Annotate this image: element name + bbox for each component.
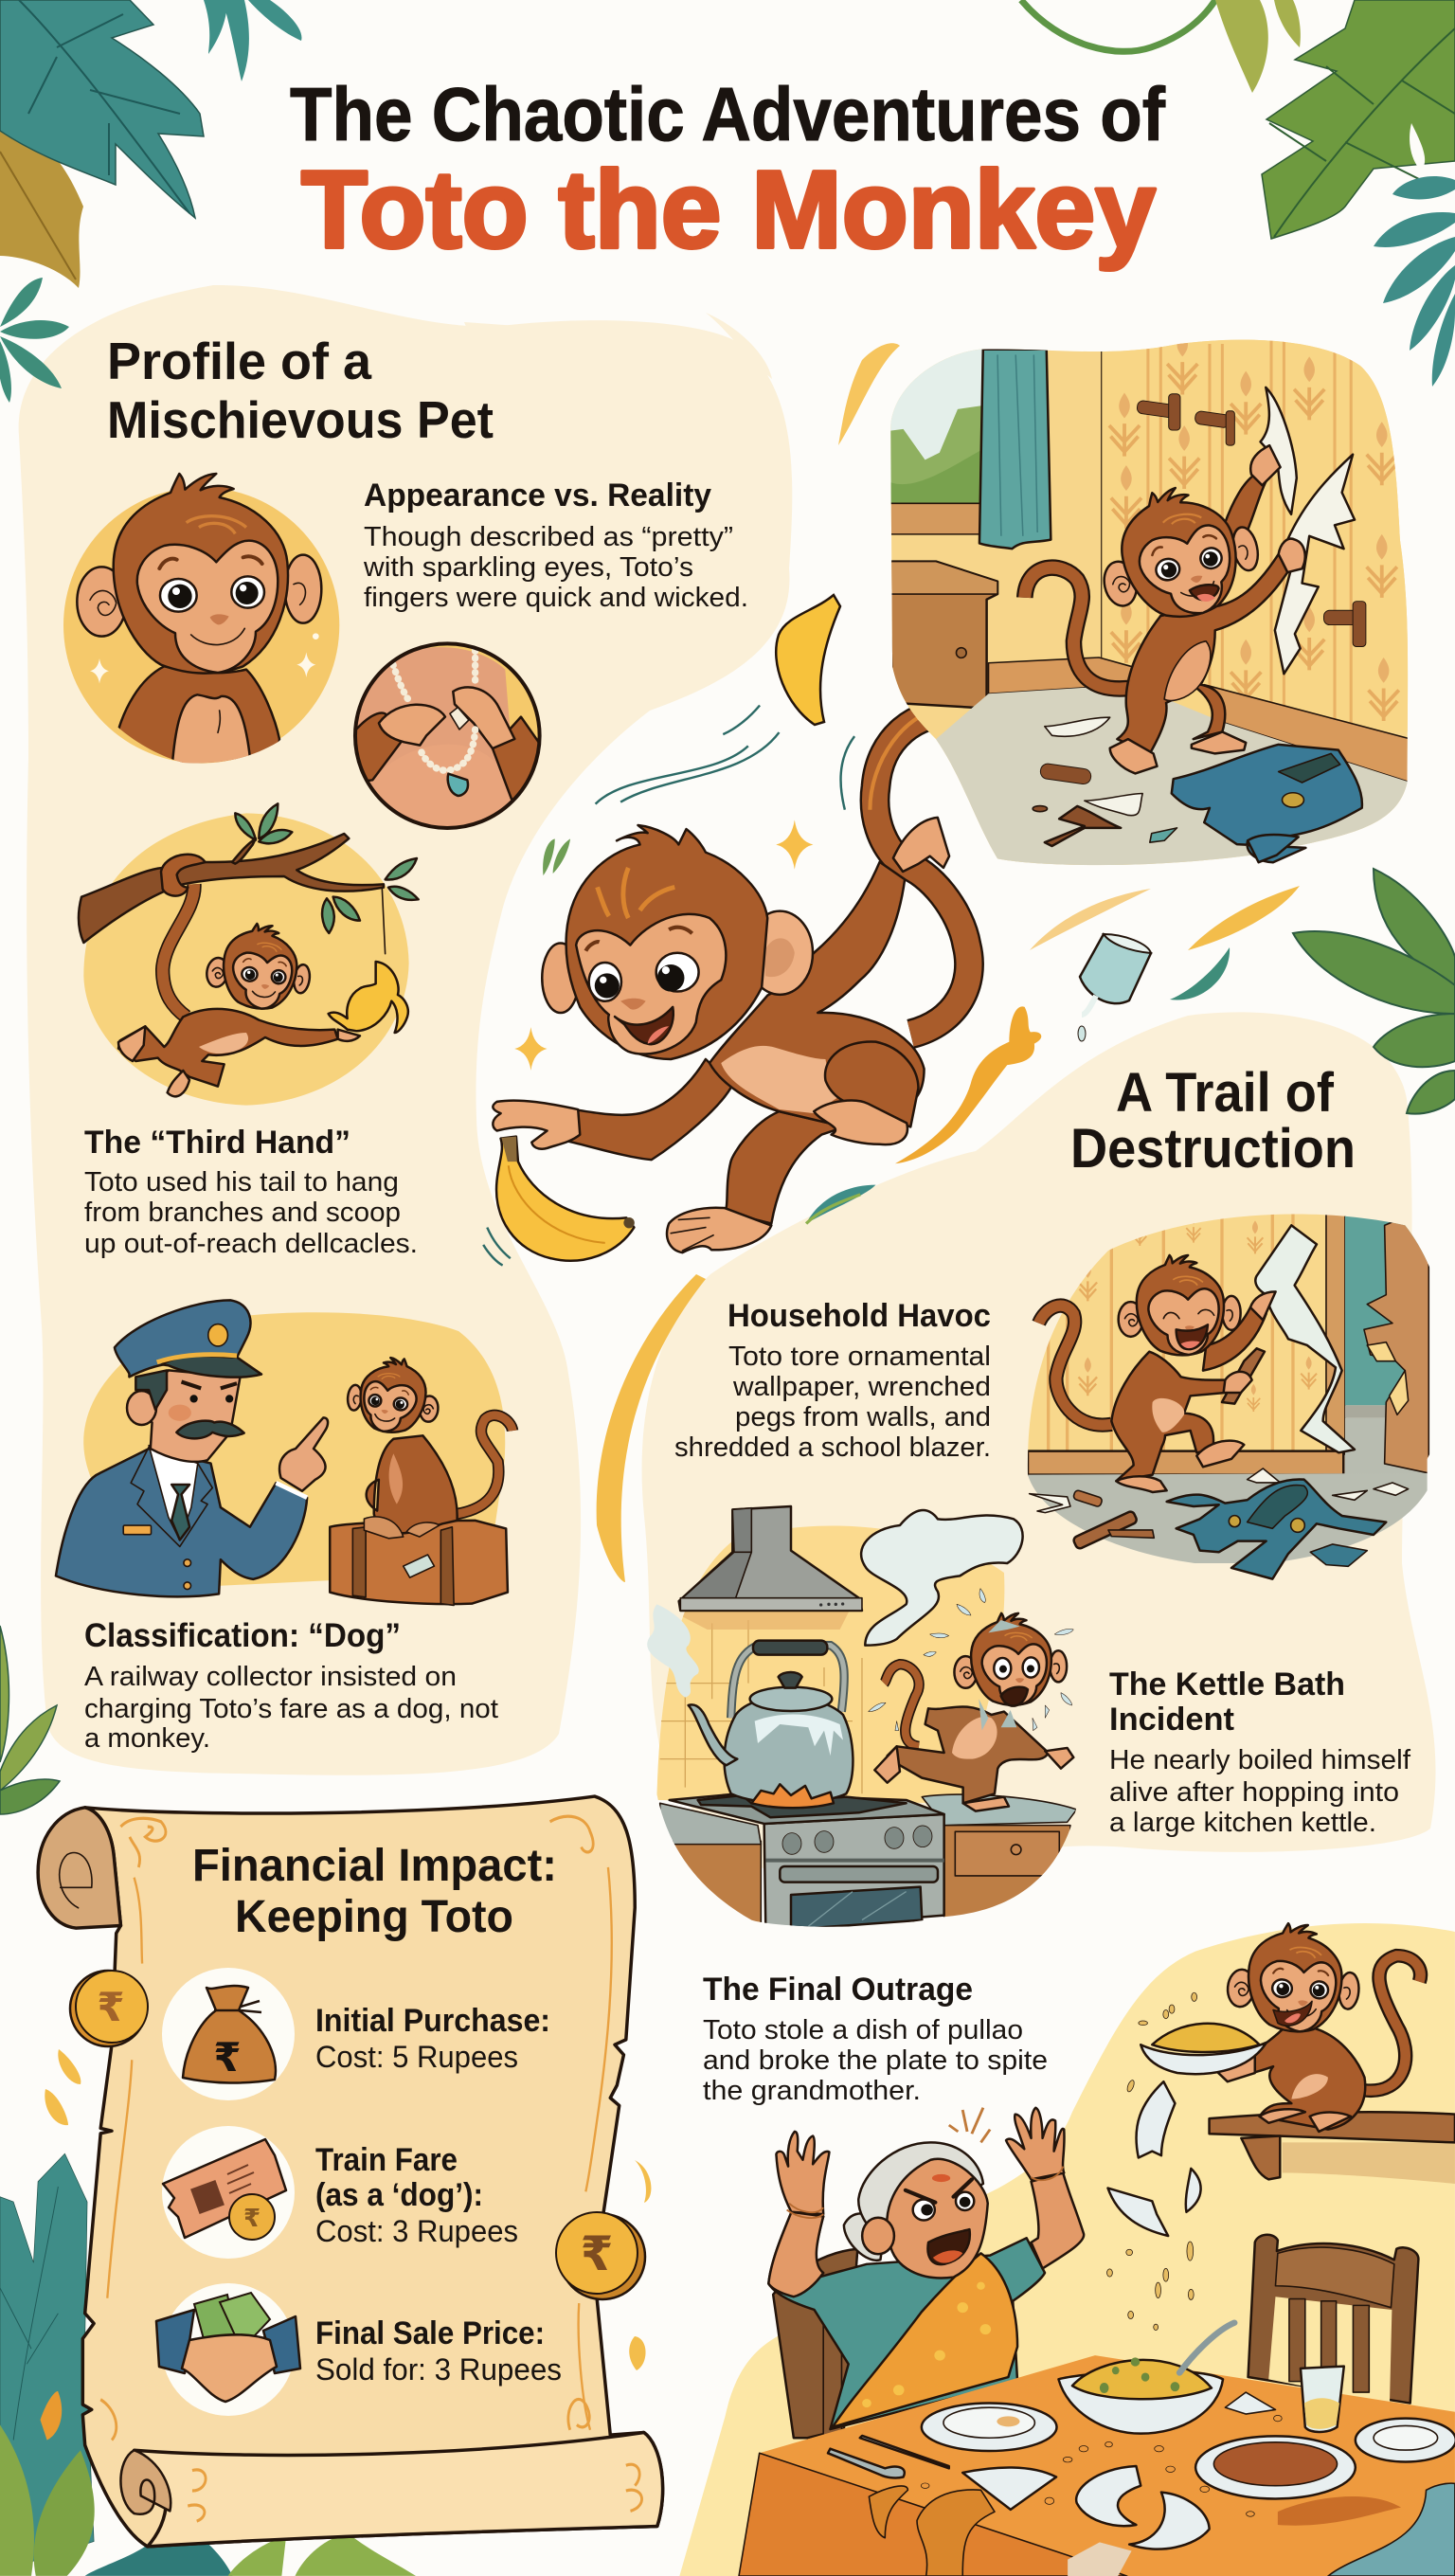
- torso with raised arm: [710, 862, 925, 1126]
- illustration: central swinging monkey with banana: [483, 705, 1041, 1266]
- heading: profile of a mischievous pet: [107, 332, 494, 449]
- floating gold flecks: [45, 2049, 651, 2370]
- text: classification dog: Classification: “Dog”: [84, 1617, 401, 1654]
- heading: a trail of destruction: Destruction: [1070, 1118, 1356, 1180]
- icon: train ticket with coin: ₹: [243, 2205, 260, 2233]
- text: household havoc: Household Havoc: [728, 1298, 991, 1334]
- text: third hand: The “Third Hand”: [84, 1125, 350, 1161]
- text: classification dog: A railway collector insisted on: [84, 1662, 457, 1692]
- text: initial purchase: Initial Purchase:: [315, 2003, 550, 2039]
- text: final sale price: [315, 2315, 562, 2387]
- icon: rupee coin left: [70, 1971, 148, 2046]
- text: household havoc: pegs from walls, and: [735, 1402, 991, 1432]
- icon: handshake with cash: [156, 2283, 300, 2416]
- text: third hand: up out-of-reach dellcacles.: [84, 1229, 418, 1259]
- text: appearance vs reality: with sparkling eyes, Toto’s: [363, 552, 693, 583]
- ears, head and face: [542, 944, 579, 1013]
- text: final outrage: The Final Outrage: [703, 1972, 973, 2008]
- lower rear leg: [725, 1111, 845, 1223]
- leaves: top-right jungle cluster: [1215, 0, 1455, 387]
- bent leg and foot: [825, 1041, 918, 1126]
- illustration: railway collector scolding monkey: [56, 1300, 512, 1605]
- title: Toto the Monkey: [301, 148, 1156, 271]
- tail: [870, 706, 1001, 1034]
- illustration: kettle bath in the kitchen: [647, 1506, 1077, 1930]
- text: third hand: from branches and scoop: [84, 1198, 401, 1228]
- banana held by hand: [496, 1137, 634, 1261]
- table: [760, 2355, 1455, 2576]
- spilled cup: [1078, 934, 1151, 1041]
- icon: money bag: [162, 1968, 295, 2100]
- illustration: final outrage scene: [679, 1918, 1455, 2576]
- icon: rupee coin right: [556, 2212, 645, 2299]
- heading: profile of a mischievous pet: Profile of a: [107, 332, 371, 390]
- text: financial impact heading: Keeping Toto: [235, 1892, 513, 1942]
- text: financial impact heading: Financial Impact:: [192, 1841, 557, 1891]
- leaves: bottom-left jungle cluster: [0, 2153, 416, 2576]
- text: appearance vs reality: Appearance vs. Reality: [364, 477, 711, 513]
- leaves: right middle plant: [1293, 869, 1455, 1114]
- text: final sale price: Sold for: 3 Rupees: [315, 2352, 562, 2387]
- title: [290, 72, 1165, 271]
- illustration: appearance monkey portrait: [63, 474, 339, 780]
- text: household havoc: Toto tore ornamental: [728, 1342, 991, 1372]
- title: The Chaotic Adventures of: [290, 72, 1165, 156]
- illustration: third hand monkey on branch: [79, 803, 419, 1106]
- hand gripping tail: [893, 818, 949, 872]
- falling banana: [776, 595, 840, 725]
- icon: money bag: ₹: [213, 2034, 242, 2081]
- panel: profile background blob: [19, 285, 792, 1775]
- panel: financial impact scroll: [38, 1796, 663, 2547]
- heading: a trail of destruction: A Trail of: [1116, 1062, 1335, 1124]
- text: kettle bath incident: He nearly boiled himself: [1109, 1745, 1411, 1775]
- table dishes: [828, 2323, 1455, 2576]
- text: initial purchase: [315, 2003, 550, 2074]
- text: final outrage: and broke the plate to spite: [703, 2045, 1048, 2076]
- text: kettle bath incident: Incident: [1109, 1702, 1234, 1738]
- icon: rupee coin left: ₹: [97, 1984, 125, 2030]
- text: classification dog: [84, 1617, 498, 1754]
- illustration: room with torn wallpaper: [874, 332, 1418, 877]
- text: household havoc: wallpaper, wrenched: [732, 1372, 991, 1402]
- vine at top: [1021, 0, 1215, 51]
- text: kettle bath incident: The Kettle Bath: [1109, 1666, 1345, 1702]
- text: final sale price: Final Sale Price:: [315, 2315, 545, 2351]
- falling plate shards and rice: [1107, 1992, 1201, 2331]
- text: kettle bath incident: a large kitchen kettle.: [1109, 1808, 1376, 1838]
- heading: profile of a mischievous pet: Mischievous Pet: [107, 390, 494, 449]
- text: third hand: Toto used his tail to hang: [84, 1167, 399, 1198]
- illustration: second wallpaper scene: [1023, 1200, 1440, 1579]
- table cloth drape: [739, 2453, 1127, 2576]
- text: train fare: Cost: 3 Rupees: [315, 2214, 518, 2248]
- decorative cream and yellow streaks: [464, 313, 1300, 1582]
- text: third hand: [84, 1125, 418, 1259]
- panel: trail of destruction background blob: [642, 1012, 1436, 1896]
- text: final outrage: Toto stole a dish of pullao: [703, 2015, 1023, 2045]
- text: initial purchase: Cost: 5 Rupees: [315, 2040, 518, 2074]
- shelf with monkey: [1141, 1918, 1455, 2184]
- cloth spill on floor: [1328, 2483, 1455, 2576]
- text: kettle bath incident: [1109, 1666, 1411, 1838]
- text: kettle bath incident: alive after hopping into: [1109, 1777, 1399, 1808]
- text: train fare: (as a ‘dog’):: [315, 2177, 483, 2213]
- text: appearance vs reality: Though described as “pretty”: [364, 522, 733, 552]
- text: final outrage: the grandmother.: [703, 2076, 921, 2106]
- leaves: left low sprigs: [0, 1626, 60, 1814]
- arm down: [565, 1059, 732, 1160]
- scroll parchment: [38, 1796, 663, 2547]
- motion lines: [483, 705, 1041, 1266]
- text: appearance vs reality: [363, 477, 748, 613]
- text: household havoc: shredded a school blazer.: [674, 1432, 991, 1463]
- text: financial impact heading: [192, 1841, 557, 1942]
- text: classification dog: charging Toto’s fare as a dog, not: [84, 1694, 498, 1724]
- text: train fare: Train Fare: [315, 2142, 458, 2178]
- yellow wall: [679, 1923, 1455, 2576]
- grandmother: [768, 2108, 1084, 2436]
- icon: rupee coin right: ₹: [581, 2226, 613, 2281]
- text: train fare: [315, 2142, 518, 2248]
- text: household havoc: [674, 1298, 991, 1463]
- text: final outrage: [703, 1972, 1048, 2106]
- small leaf by the cup: [1170, 947, 1230, 1000]
- heading: a trail of destruction: [1070, 1062, 1356, 1180]
- illustration: necklace in monkey hands: [350, 643, 543, 843]
- left chair: [773, 2249, 857, 2438]
- icon: train ticket with coin: [162, 2126, 295, 2259]
- text: appearance vs reality: fingers were quick and wicked.: [364, 583, 748, 613]
- text: classification dog: a monkey.: [84, 1723, 210, 1754]
- leaves: top-left jungle cluster: [0, 0, 301, 403]
- right chair: [1248, 2235, 1418, 2404]
